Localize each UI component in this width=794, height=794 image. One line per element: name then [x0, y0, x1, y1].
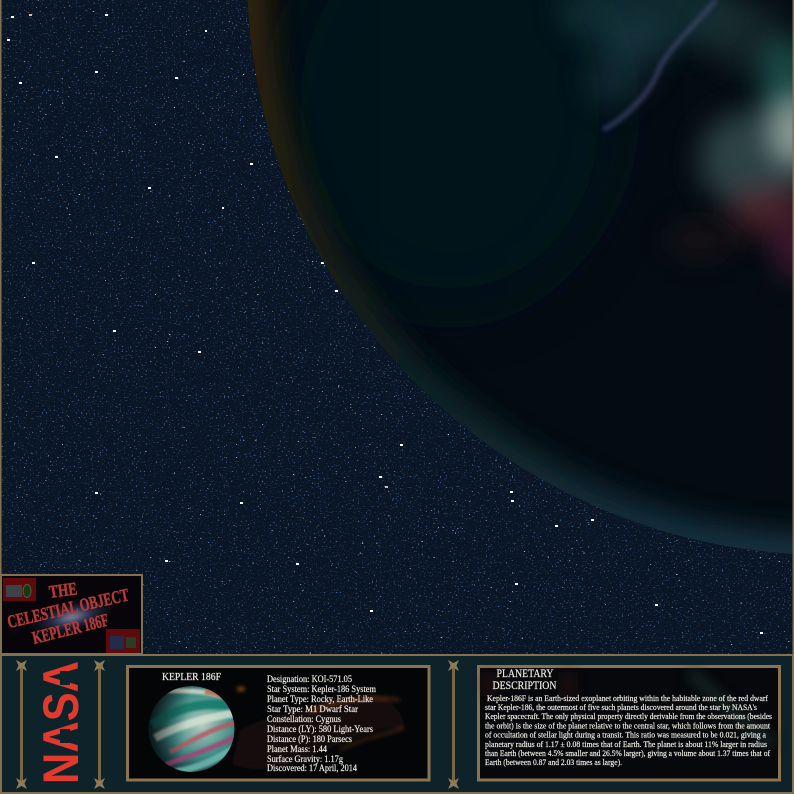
description heading: PLANETARY: [496, 668, 554, 680]
badge title text: CELESTIAL OBJECT: [5, 585, 131, 632]
badge corner inset left: [3, 578, 36, 601]
panel background wisps: [484, 672, 775, 745]
description body text: the orbit) is the size of the planet relative to the central star, which follows from the amount: [485, 722, 771, 730]
planet facts list: Planet Mass: 1.44: [267, 745, 327, 755]
planet facts list: Distance (LY): 580 Light-Years: [267, 724, 373, 735]
planet facts list: Star System: Kepler-186 System: [267, 685, 377, 695]
planet facts list: Designation: KOI-571.05: [267, 675, 352, 685]
description heading: DESCRIPTION: [492, 680, 556, 692]
description body text: [485, 694, 772, 767]
planet facts list: Constellation: Cygnus: [267, 715, 341, 725]
planet facts list: Star Type: M1 Dwarf Star: [267, 704, 359, 715]
description body text: of occultation of stellar light during a transit. This ratio was measured to be 0.021, giving a: [485, 730, 766, 740]
badge galaxy: [17, 587, 127, 647]
description body text: than Earth (between 4.5% smaller and 26.5% larger), giving a volume about 1.37 times that of: [485, 749, 770, 758]
planet name: KEPLER 186F: [162, 672, 221, 683]
description body text: planetary radius of 1.17 ± 0.08 times that of Earth. The planet is about 11% larger in radius: [485, 740, 767, 749]
planet facts list: Planet Type: Rocky, Earth-Like: [267, 695, 373, 705]
planet facts list: Discovered: 17 April, 2014: [267, 764, 357, 774]
planet facts list: Distance (P): 180 Parsecs: [267, 734, 352, 745]
description heading: [492, 668, 556, 692]
title badge: [1, 575, 142, 654]
ornament column middle right: [448, 660, 459, 789]
badge title text: THE: [48, 578, 78, 602]
panel: planet facts: [128, 666, 429, 780]
badge corner inset right: [106, 629, 140, 653]
description body text: Kepler-186F is an Earth-sized exoplanet orbiting within the habitable zone of the red dwarf: [487, 694, 768, 703]
NASA worm logo: NASA: [33, 661, 89, 784]
description body text: star Kepler-186, the outermost of five such planets discovered around the star by NASA's: [485, 703, 757, 712]
badge title text: KEPLER 186F: [30, 610, 111, 648]
ornament column left: [16, 660, 27, 789]
badge title text: [5, 578, 131, 648]
panel: planetary description: [478, 666, 780, 780]
description body text: Earth (between 0.87 and 2.03 times as large).: [485, 758, 622, 767]
planet facts list: [267, 675, 377, 774]
small planet illustration: [148, 686, 240, 772]
panel background swirl: [232, 687, 404, 769]
large planet Kepler-186F: [240, 0, 794, 590]
planet facts list: Surface Gravity: 1.17g: [267, 754, 343, 765]
ornament column middle left: [94, 660, 105, 789]
